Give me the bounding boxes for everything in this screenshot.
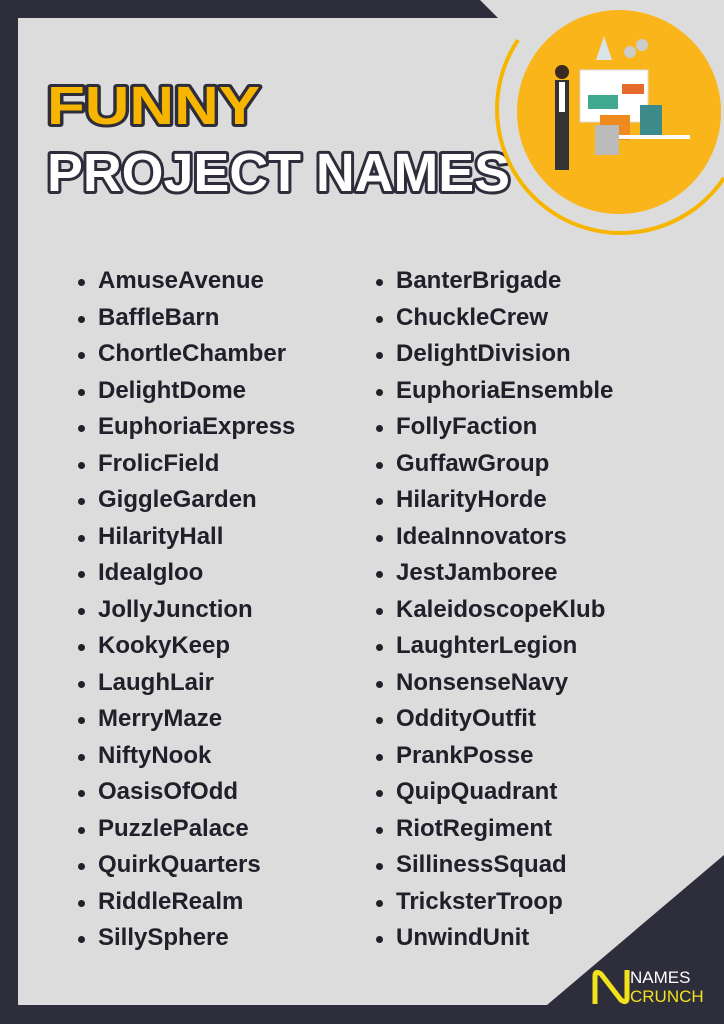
list: right column: JestJamboree xyxy=(396,559,557,586)
list: right column: LaughterLegion xyxy=(396,632,577,659)
list: left column: AmuseAvenue xyxy=(98,267,264,294)
illustration: team circle xyxy=(495,10,724,235)
list: right column: SillinessSquad xyxy=(396,851,567,878)
list: right column: QuipQuadrant xyxy=(396,778,557,805)
list: left column: PuzzlePalace xyxy=(98,814,249,842)
list: left column: DelightDome xyxy=(98,376,246,404)
list: left column: IdeaIgloo xyxy=(98,559,203,586)
list: right column: ChuckleCrew xyxy=(396,304,548,330)
title: PROJECT NAMES xyxy=(47,143,510,203)
list: left column: JollyJunction xyxy=(98,596,253,622)
list: right column: NonsenseNavy xyxy=(396,668,568,696)
list: right column: RiotRegiment xyxy=(396,814,552,842)
list: right column: KaleidoscopeKlub xyxy=(396,596,605,622)
list: right column: EuphoriaEnsemble xyxy=(396,376,613,404)
list: right column: UnwindUnit xyxy=(396,924,529,951)
list: left column: FrolicField xyxy=(98,450,219,476)
list: right column: GuffawGroup xyxy=(396,450,549,476)
logo xyxy=(592,968,704,1006)
list: right column: FollyFaction xyxy=(396,413,537,440)
list: right column xyxy=(376,267,613,951)
list: left column: EuphoriaExpress xyxy=(98,413,295,440)
list: left column: RiddleRealm xyxy=(98,888,243,914)
list: right column: DelightDivision xyxy=(396,340,571,367)
list: left column: ChortleChamber xyxy=(98,340,286,367)
list: left column: MerryMaze xyxy=(98,705,222,732)
list: right column: OddityOutfit xyxy=(396,705,536,732)
list: right column: TricksterTroop xyxy=(396,888,563,914)
title xyxy=(47,76,511,203)
logo: CRUNCH xyxy=(630,987,704,1006)
list: left column: SillySphere xyxy=(98,924,229,951)
list: right column: PrankPosse xyxy=(396,742,533,768)
list: right column: IdeaInnovators xyxy=(396,522,567,550)
list: left column xyxy=(78,267,295,951)
title: FUNNY xyxy=(47,76,260,136)
list: left column: LaughLair xyxy=(98,668,214,696)
list: right column: BanterBrigade xyxy=(396,267,561,294)
logo: NAMES xyxy=(630,968,690,987)
list: left column: BaffleBarn xyxy=(98,304,219,330)
list: left column: KookyKeep xyxy=(98,632,230,659)
list: left column: QuirkQuarters xyxy=(98,851,261,878)
list: left column: NiftyNook xyxy=(98,742,211,768)
list: left column: OasisOfOdd xyxy=(98,778,238,805)
list: right column: HilarityHorde xyxy=(396,486,547,513)
list: left column: GiggleGarden xyxy=(98,486,257,513)
list: left column: HilarityHall xyxy=(98,522,223,550)
